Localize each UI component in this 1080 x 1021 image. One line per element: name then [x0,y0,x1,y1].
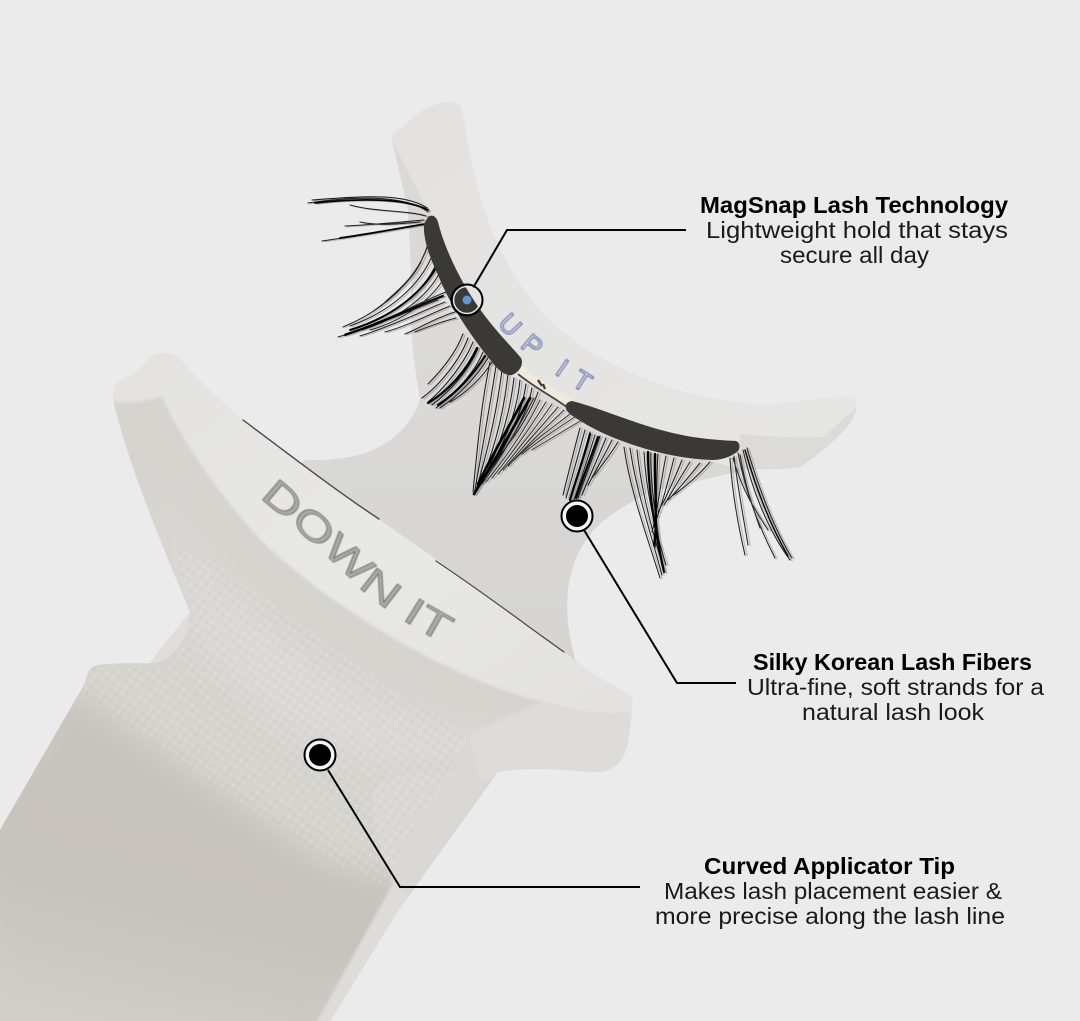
arm tip bevel [735,407,857,469]
callout: Curved Applicator Tip: Curved Applicator Tip [704,853,955,879]
body of applicator behind the lashes [240,280,745,680]
arm inner shading [392,140,430,290]
handle right edge [317,884,404,1021]
marker: fibers [562,500,592,532]
lower handle face [0,690,420,1021]
applicator: upper arm and body [240,102,857,680]
applicator: lower head and handle [0,350,640,1021]
callout: Silky Korean Lash Fibers: Ultra-fine, soft strands for a [747,674,1044,700]
marker: magsnap [452,284,482,316]
lash cluster middle left [422,334,492,408]
lash cluster left [338,244,456,337]
lash cluster center long [473,362,538,495]
leader line: fibers [584,530,736,683]
marker: tip [304,740,336,770]
callout: Silky Korean Lash Fibers [747,649,1044,725]
callout: Curved Applicator Tip: more precise along the lash line [655,903,1005,929]
callout: Silky Korean Lash Fibers: natural lash look [802,699,985,725]
callout: MagSnap Lash Technology: Lightweight hold that stays [706,217,1008,243]
lash cluster right long [624,447,710,578]
back ridge behind head [150,612,205,668]
callout: Curved Applicator Tip [655,853,1005,929]
callout: Silky Korean Lash Fibers: Silky Korean Lash Fibers [753,649,1032,675]
callout: MagSnap Lash Technology: secure all day [780,242,930,268]
leader line: tip [328,770,640,887]
magnetic strip between bands [516,366,572,408]
shaded surfaces clipped to applicator [0,350,640,1021]
lash cluster center fan [482,398,582,484]
handle silhouette [0,353,632,1021]
leader line: magsnap [473,230,686,288]
lash cluster center right [563,428,618,500]
callout: MagSnap Lash Technology: MagSnap Lash Technology [700,192,1008,218]
curved head top face [100,350,640,716]
lash fibers density layer [310,198,794,579]
lash cluster far right [730,448,792,560]
magnet band lower [566,401,740,460]
groove lines on head [243,420,564,652]
under-bevel shading [150,470,540,770]
head lip lower tip [498,704,631,772]
lash cluster top [308,197,428,241]
callout: MagSnap Lash Technology [700,192,1008,268]
callout: Curved Applicator Tip: Makes lash placement easier & [664,878,1002,904]
handle light ledge [386,860,424,894]
engraved text: DOWN IT: DOWN IT [262,478,456,638]
upper arm [392,102,857,469]
lash fibers [308,197,792,578]
engraved text: UP IT: UP IT [500,312,595,390]
magnet band upper [424,216,522,375]
textured grip [83,550,470,888]
